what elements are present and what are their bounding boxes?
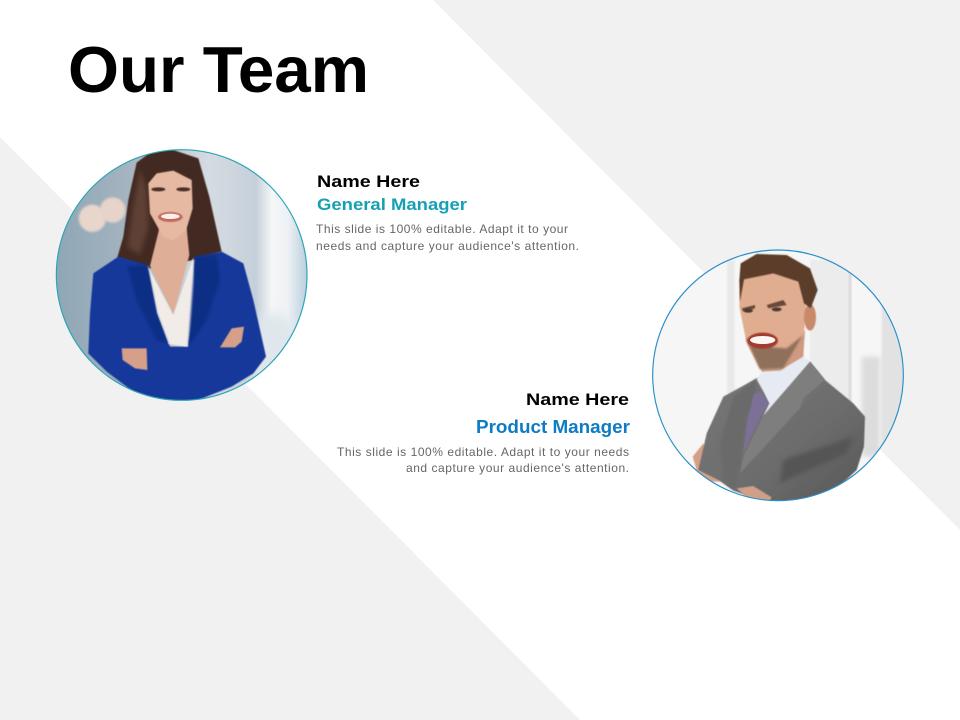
role: general manager: General Manager <box>317 195 467 214</box>
name: product manager: Name Here <box>526 390 629 409</box>
description: product manager: and capture your audience's attention. <box>406 461 629 475</box>
background shape: top right grey diagonal <box>433 0 960 530</box>
description: general manager <box>316 222 579 253</box>
profile text: product manager <box>337 390 630 475</box>
background shape: bottom left grey diagonal <box>0 137 580 720</box>
description: product manager <box>337 445 629 475</box>
description: general manager: This slide is 100% editable. Adapt it to your <box>316 222 568 236</box>
role: product manager: Product Manager <box>476 417 630 437</box>
portrait: woman in blue blazer <box>53 147 313 403</box>
title: Our Team <box>68 33 369 106</box>
description: general manager: needs and capture your audience's attention. <box>316 239 579 253</box>
profile text: general manager <box>316 172 579 253</box>
name: general manager: Name Here <box>317 172 420 191</box>
description: product manager: This slide is 100% editable. Adapt it to your needs <box>337 445 629 459</box>
portrait: man in grey suit <box>650 247 910 505</box>
